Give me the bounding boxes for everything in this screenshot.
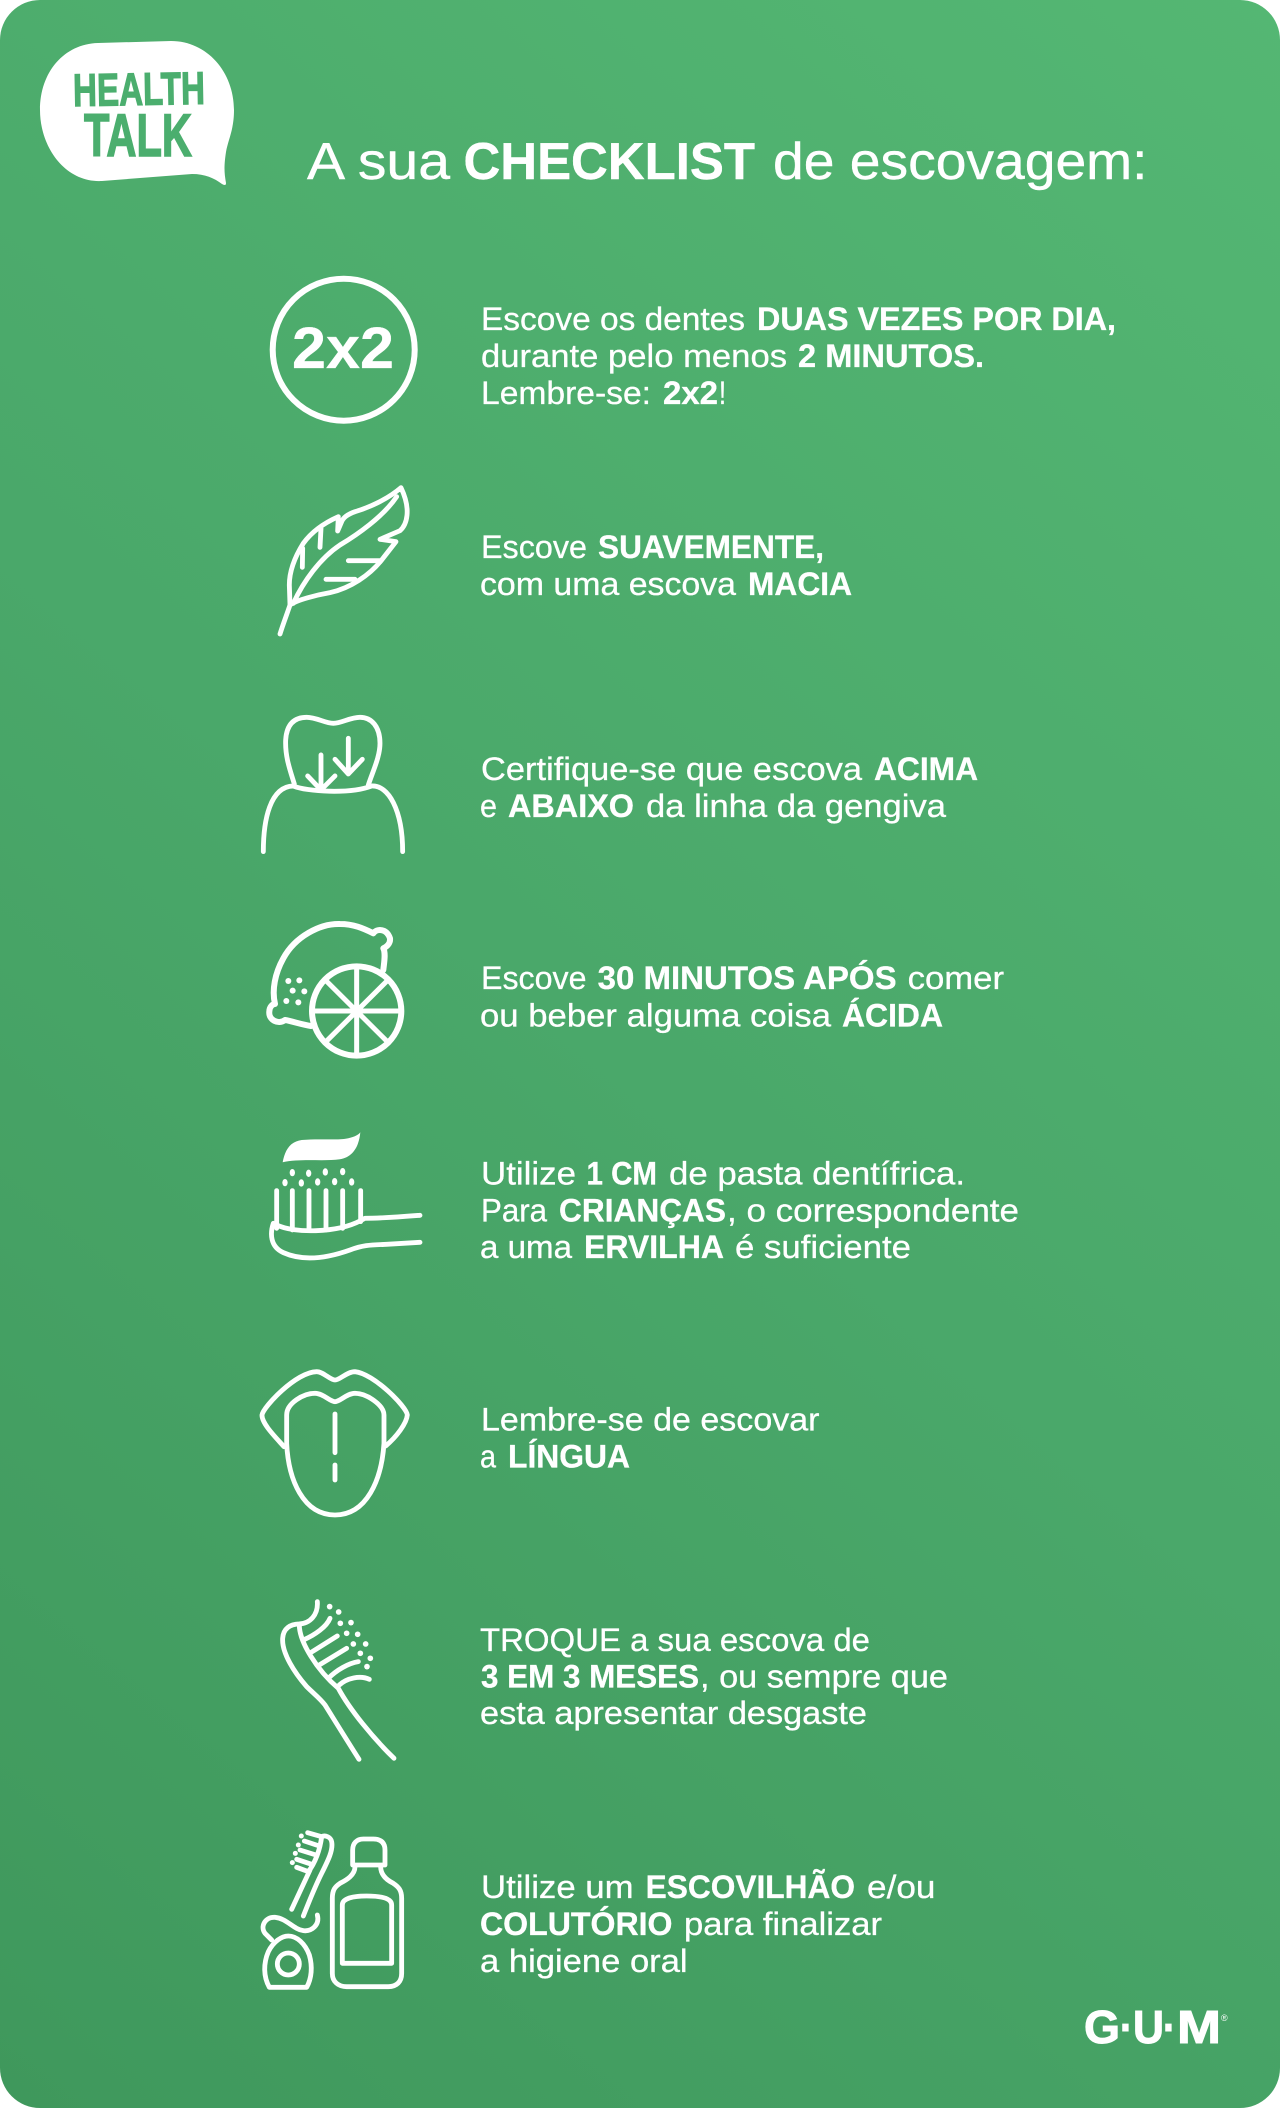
text: gentle brushing — [480, 529, 852, 602]
icon: worn toothbrush — [283, 1602, 394, 1759]
text: interdental brush and mouthwash: para finalizar — [684, 1906, 882, 1942]
text: toothpaste amount — [480, 1156, 1019, 1265]
text: interdental brush and mouthwash: Utilize um — [481, 1869, 634, 1905]
text: acidic food: comer — [908, 960, 1004, 996]
text: twice a day: ! — [719, 375, 726, 411]
text: twice a day: Escove os dentes — [481, 301, 745, 337]
text: interdental brush and mouthwash: a higiene oral — [480, 1943, 688, 1979]
text: twice a day: durante pelo menos — [481, 338, 787, 374]
text: gum line — [480, 751, 978, 824]
text: gum line: e — [480, 788, 497, 824]
text: gentle brushing: com uma escova — [480, 566, 736, 602]
text: tongue: LÍNGUA — [508, 1439, 630, 1475]
logo: GUM: ® — [1221, 2013, 1228, 2023]
text: toothpaste amount: de pasta dentífrica. — [669, 1156, 965, 1192]
text: twice a day: 2 MINUTOS. — [798, 338, 984, 374]
text: interdental brush and mouthwash: COLUTÓRIO — [480, 1906, 672, 1942]
icon: interdental brush, floss and mouthwash — [263, 1833, 402, 1987]
icon: toothbrush with paste — [271, 1132, 420, 1258]
text: twice a day — [481, 301, 1116, 411]
text: replace brush: TROQUE a sua escova de — [480, 1622, 870, 1658]
title: de escovagem: — [773, 133, 1148, 191]
text: gentle brushing: MACIA — [748, 566, 852, 602]
text: tongue: Lembre-se de escovar — [481, 1402, 820, 1438]
text: toothpaste amount: é suficiente — [735, 1229, 911, 1265]
row: gentle brushing — [280, 488, 852, 634]
text: acidic food — [480, 960, 1004, 1034]
logo: GUM: M — [1177, 2001, 1221, 2053]
text: gum line: ACIMA — [874, 751, 978, 787]
text: toothpaste amount: Para — [481, 1193, 547, 1229]
text: toothpaste amount: CRIANÇAS — [559, 1193, 726, 1229]
text: acidic food: Escove — [481, 960, 586, 996]
text: tongue: a — [480, 1439, 496, 1475]
icon: 2x2 circle: 2x2 — [292, 316, 394, 381]
text: gentle brushing: SUAVEMENTE, — [598, 529, 824, 565]
logo: Health Talk speech bubble: TALK — [84, 102, 192, 169]
text: acidic food: ÁCIDA — [842, 998, 943, 1034]
title: CHECKLIST — [464, 133, 755, 191]
text: replace brush: , ou sempre que — [700, 1659, 948, 1695]
text: replace brush — [480, 1622, 948, 1731]
logo: GUM: · — [1120, 2001, 1133, 2053]
text: gum line: da linha da gengiva — [646, 788, 946, 824]
title: A sua — [307, 133, 450, 191]
row: twice a day — [273, 279, 1116, 421]
text: twice a day: Lembre-se: — [481, 375, 651, 411]
text: interdental brush and mouthwash: ESCOVILHÃO — [646, 1869, 855, 1905]
logo: GUM: · — [1163, 2001, 1176, 2053]
icon: 2x2 circle — [273, 279, 415, 421]
logo: GUM: G — [1084, 2001, 1120, 2053]
text: twice a day: DUAS VEZES POR DIA, — [757, 301, 1116, 337]
row: tongue — [262, 1372, 820, 1515]
text: interdental brush and mouthwash: e/ou — [867, 1869, 936, 1905]
row: gum line — [263, 717, 978, 852]
text: interdental brush and mouthwash — [480, 1869, 936, 1979]
row: interdental brush and mouthwash — [263, 1833, 936, 1987]
row: acidic food — [269, 924, 1004, 1056]
text: acidic food: ou beber alguma coisa — [480, 998, 831, 1034]
text: gum line: ABAIXO — [508, 788, 634, 824]
text: gum line: Certifique-se que escova — [481, 751, 862, 787]
logo: Health Talk speech bubble — [40, 41, 234, 185]
icon: lemon — [269, 924, 401, 1056]
text: twice a day: 2x2 — [663, 375, 718, 411]
text: gentle brushing: Escove — [481, 529, 587, 565]
text: tongue — [480, 1402, 820, 1475]
logo: GUM: U — [1133, 2001, 1164, 2053]
text: acidic food: 30 MINUTOS APÓS — [598, 960, 897, 996]
text: toothpaste amount: a uma — [480, 1229, 572, 1265]
text: toothpaste amount: 1 CM — [586, 1156, 657, 1192]
text: toothpaste amount: ERVILHA — [584, 1229, 724, 1265]
text: toothpaste amount: , o correspondente — [727, 1193, 1019, 1229]
text: toothpaste amount: Utilize — [481, 1156, 576, 1192]
row: replace brush — [283, 1602, 948, 1759]
icon: tongue — [262, 1372, 407, 1515]
text: replace brush: esta apresentar desgaste — [480, 1695, 867, 1731]
icon: feather — [280, 488, 407, 634]
icon: tooth and gum with arrows — [263, 717, 403, 852]
text: replace brush: 3 EM 3 MESES — [481, 1659, 699, 1695]
row: toothpaste amount — [271, 1132, 1019, 1265]
logo: Health Talk speech bubble: HEALTH — [73, 62, 205, 116]
